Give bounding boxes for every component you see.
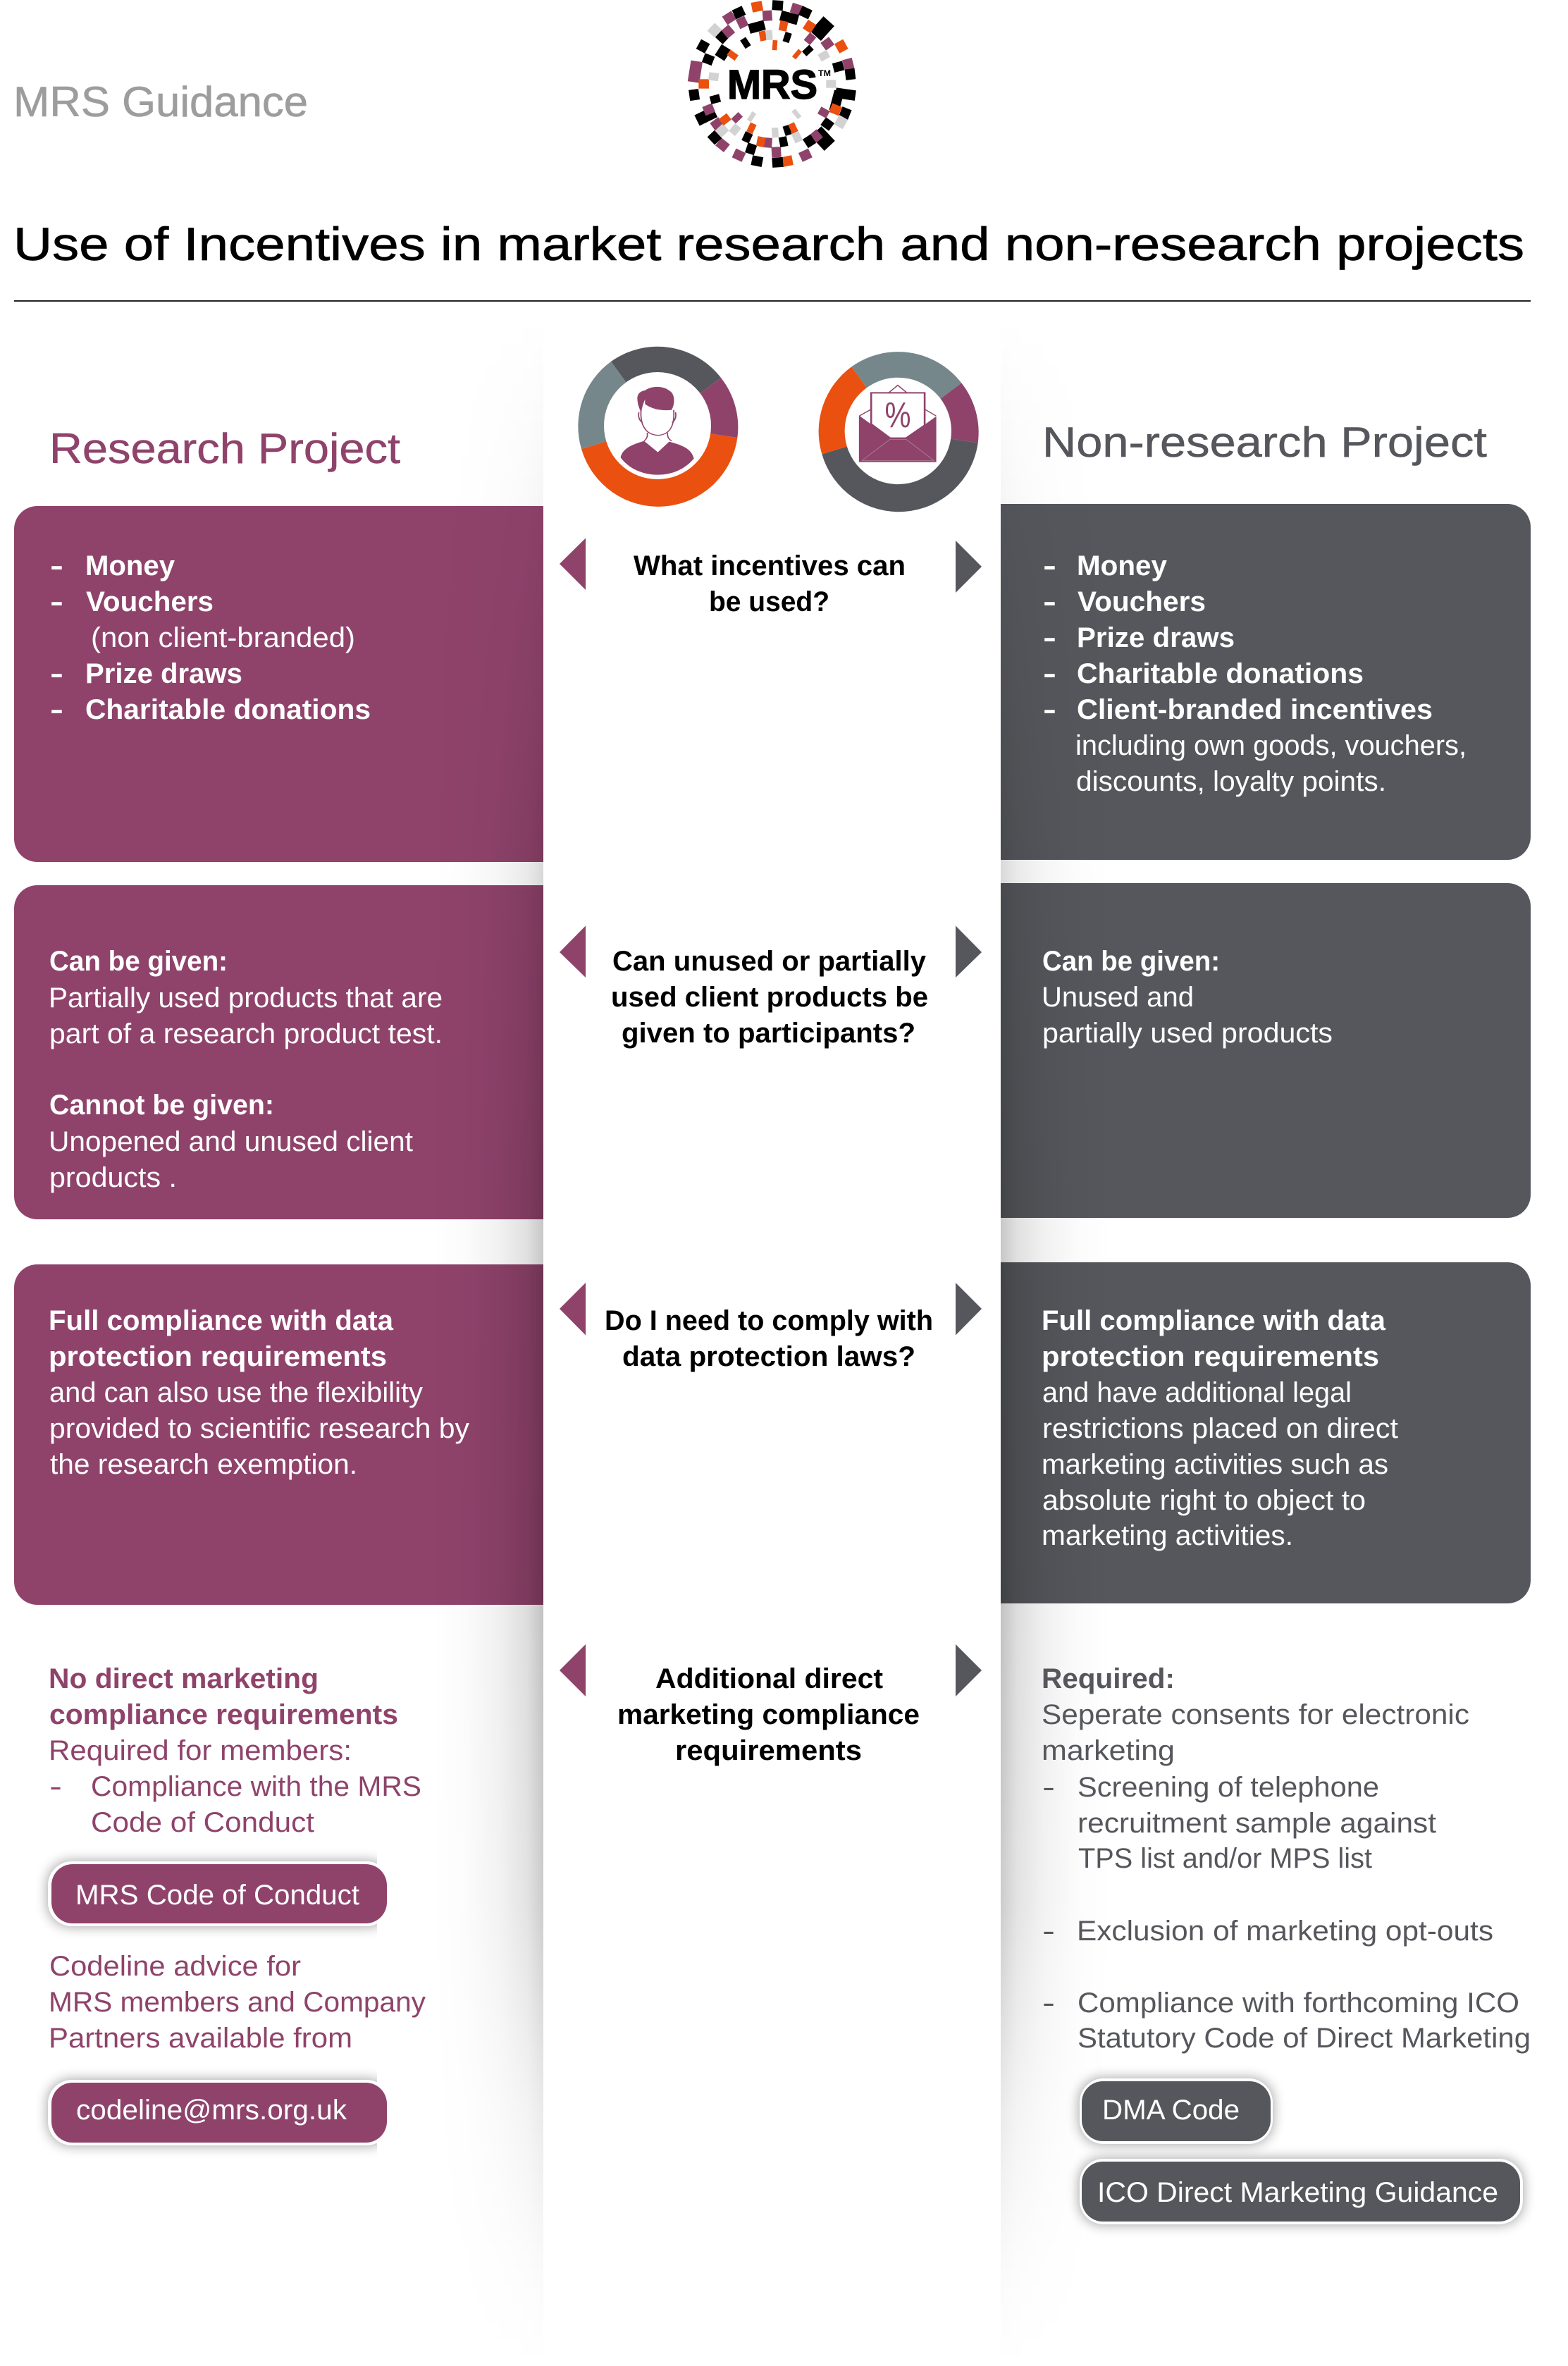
text: research data protection: Full compliance with data <box>49 1305 394 1336</box>
question: client products <box>611 946 928 1049</box>
question: what incentives: be used? <box>709 586 829 617</box>
text: research data protection: the research exemption. <box>50 1449 357 1480</box>
text: non-research direct marketing: Seperate consents for electronic <box>1042 1699 1469 1730</box>
text: non-research data protection: marketing activities. <box>1042 1520 1293 1551</box>
arrow: right row 4 <box>956 1644 982 1696</box>
text: non-research client products: partially used products <box>1042 1018 1333 1049</box>
text: research client products: Unopened and unused client <box>49 1126 413 1157</box>
text: non-research direct marketing: - <box>1042 1772 1055 1803</box>
text: non-research direct marketing: Compliance with forthcoming ICO <box>1078 1988 1519 2019</box>
question: data protection: data protection laws? <box>622 1341 915 1372</box>
text: Codeline advice: MRS members and Company <box>49 1987 426 2018</box>
donut icon: discount envelope <box>819 352 979 512</box>
text: Codeline advice: Partners available from <box>49 2023 352 2054</box>
MRS logo: TM <box>818 68 831 78</box>
text: research incentives: (non client-branded) <box>91 622 355 653</box>
arrow: left row 3 <box>560 1283 586 1335</box>
text: non-research direct marketing: TPS list and/or MPS list <box>1078 1843 1372 1874</box>
text: non-research incentives: Money <box>1077 550 1168 581</box>
text: non-research data protection <box>1042 1305 1398 1551</box>
text: non-research incentives: Client-branded incentives <box>1077 694 1433 725</box>
text: research client products: part of a research product test. <box>49 1018 443 1049</box>
button: DMA Code: DMA Code <box>1102 2095 1240 2126</box>
arrow: left row 4 <box>560 1644 586 1696</box>
text: non-research incentives: - <box>1043 550 1056 581</box>
text: research direct marketing: - <box>49 1771 62 1802</box>
text: non-research direct marketing: Required: <box>1042 1663 1175 1694</box>
text: non-research data protection: marketing activities such as <box>1042 1449 1388 1480</box>
text: research direct marketing <box>49 1663 421 1838</box>
title: Use of Incentives in market research and non-research projects <box>13 218 1524 270</box>
MRS Guidance label: MRS Guidance <box>13 78 308 125</box>
text: research direct marketing: compliance requirements <box>49 1699 398 1730</box>
question: direct marketing: marketing compliance <box>617 1699 920 1730</box>
button: ICO Direct Marketing Guidance: ICO Direct Marketing Guidance <box>1097 2177 1498 2208</box>
text: non-research direct marketing: Screening of telephone <box>1078 1772 1379 1803</box>
panel background: research data protection <box>14 1264 543 1605</box>
text: non-research direct marketing: marketing <box>1042 1735 1175 1766</box>
text: non-research direct marketing: - <box>1042 1988 1055 2019</box>
donut icon: discount envelope: % <box>885 395 910 435</box>
text: research incentives: - <box>50 694 63 725</box>
text: research incentives: Money <box>85 550 175 581</box>
panel background: non-research data protection <box>1001 1262 1531 1603</box>
text: research incentives: Charitable donations <box>85 694 371 725</box>
text: research data protection <box>49 1305 469 1480</box>
text: research client products <box>49 946 443 1193</box>
text: research incentives: - <box>50 550 63 581</box>
text: non-research direct marketing: Statutory Code of Direct Marketing <box>1078 2023 1531 2054</box>
text: research direct marketing: Compliance with the MRS <box>91 1771 421 1802</box>
button: codeline email: codeline@mrs.org.uk <box>76 2095 347 2126</box>
text: non-research incentives: - <box>1043 622 1056 653</box>
text: non-research data protection: protection requirements <box>1042 1341 1379 1372</box>
text: non-research incentives: - <box>1043 586 1056 617</box>
text: non-research incentives: including own goods, vouchers, <box>1075 730 1467 761</box>
text: non-research incentives: - <box>1043 694 1056 725</box>
question: direct marketing: Additional direct <box>655 1663 883 1694</box>
MRS logo: MRS <box>727 62 817 108</box>
arrow: right row 1 <box>956 541 982 593</box>
button: MRS Code of Conduct <box>48 1861 390 1926</box>
text: non-research data protection: Full compliance with data <box>1042 1305 1386 1336</box>
text: research data protection: protection requirements <box>49 1341 387 1372</box>
text: research incentives: Prize draws <box>85 658 242 689</box>
text: non-research direct marketing <box>1042 1663 1531 2054</box>
button: ICO Direct Marketing Guidance <box>1080 2159 1523 2224</box>
button: MRS Code of Conduct: MRS Code of Conduct <box>75 1880 359 1911</box>
text: non-research incentives: - <box>1043 658 1056 689</box>
panel background: non-research incentives <box>1001 504 1531 860</box>
text: non-research incentives: Charitable donations <box>1077 658 1364 689</box>
text: Codeline advice <box>49 1951 426 2054</box>
panel background: non-research client products <box>1001 883 1531 1218</box>
panel background: research client products <box>14 885 543 1219</box>
arrow: left row 2 <box>560 926 586 978</box>
text: non-research client products: Unused and <box>1042 982 1194 1013</box>
text: non-research incentives: Prize draws <box>1077 622 1235 653</box>
text: research direct marketing: No direct marketing <box>49 1663 319 1694</box>
button: DMA Code <box>1080 2078 1273 2144</box>
text: research data protection: provided to scientific research by <box>49 1413 469 1444</box>
text: research client products: Cannot be given: <box>49 1090 274 1121</box>
text: research incentives: - <box>50 586 63 617</box>
text: non-research direct marketing: recruitment sample against <box>1078 1808 1436 1839</box>
text: research client products: Can be given: <box>49 946 228 977</box>
heading: Non-research Project: Non-research Project <box>1042 419 1487 466</box>
question: client products: given to participants? <box>622 1018 915 1049</box>
donut icon: person <box>578 347 738 507</box>
arrow: right row 2 <box>956 926 982 978</box>
text: research client products: Partially used products that are <box>49 982 443 1013</box>
question: what incentives <box>634 550 906 617</box>
question: data protection <box>605 1305 933 1372</box>
panel background: research incentives <box>14 506 543 862</box>
text: research client products: products . <box>49 1162 177 1193</box>
text: research incentives <box>50 550 371 725</box>
question: client products: Can unused or partially <box>612 946 927 977</box>
text: Codeline advice: Codeline advice for <box>49 1951 301 1982</box>
arrow: left row 1 <box>560 538 586 590</box>
text: non-research data protection: and have additional legal <box>1042 1377 1352 1408</box>
question: data protection: Do I need to comply with <box>605 1305 933 1336</box>
text: non-research direct marketing: - <box>1042 1916 1055 1947</box>
question: what incentives: What incentives can <box>634 550 906 581</box>
MRS logo <box>688 0 856 168</box>
text: non-research client products <box>1042 946 1333 1049</box>
question: direct marketing: requirements <box>675 1735 862 1766</box>
text: non-research data protection: absolute right to object to <box>1042 1485 1366 1516</box>
text: research direct marketing: Required for members: <box>49 1735 352 1766</box>
text: research data protection: and can also use the flexibility <box>49 1377 423 1408</box>
text: non-research data protection: restrictions placed on direct <box>1042 1413 1398 1444</box>
heading: Research Project: Research Project <box>49 425 400 472</box>
text: non-research incentives <box>1043 550 1467 797</box>
text: research incentives: - <box>50 658 63 689</box>
text: research incentives: Vouchers <box>86 586 214 617</box>
text: non-research incentives: Vouchers <box>1078 586 1206 617</box>
text: non-research incentives: discounts, loyalty points. <box>1076 766 1386 797</box>
text: research direct marketing: Code of Conduct <box>91 1807 314 1838</box>
text: non-research client products: Can be given: <box>1042 946 1220 977</box>
question: direct marketing <box>617 1663 920 1766</box>
question: client products: used client products be <box>611 982 928 1013</box>
button: codeline email <box>48 2080 390 2145</box>
arrow: right row 3 <box>956 1283 982 1335</box>
text: non-research direct marketing: Exclusion of marketing opt-outs <box>1077 1916 1493 1947</box>
